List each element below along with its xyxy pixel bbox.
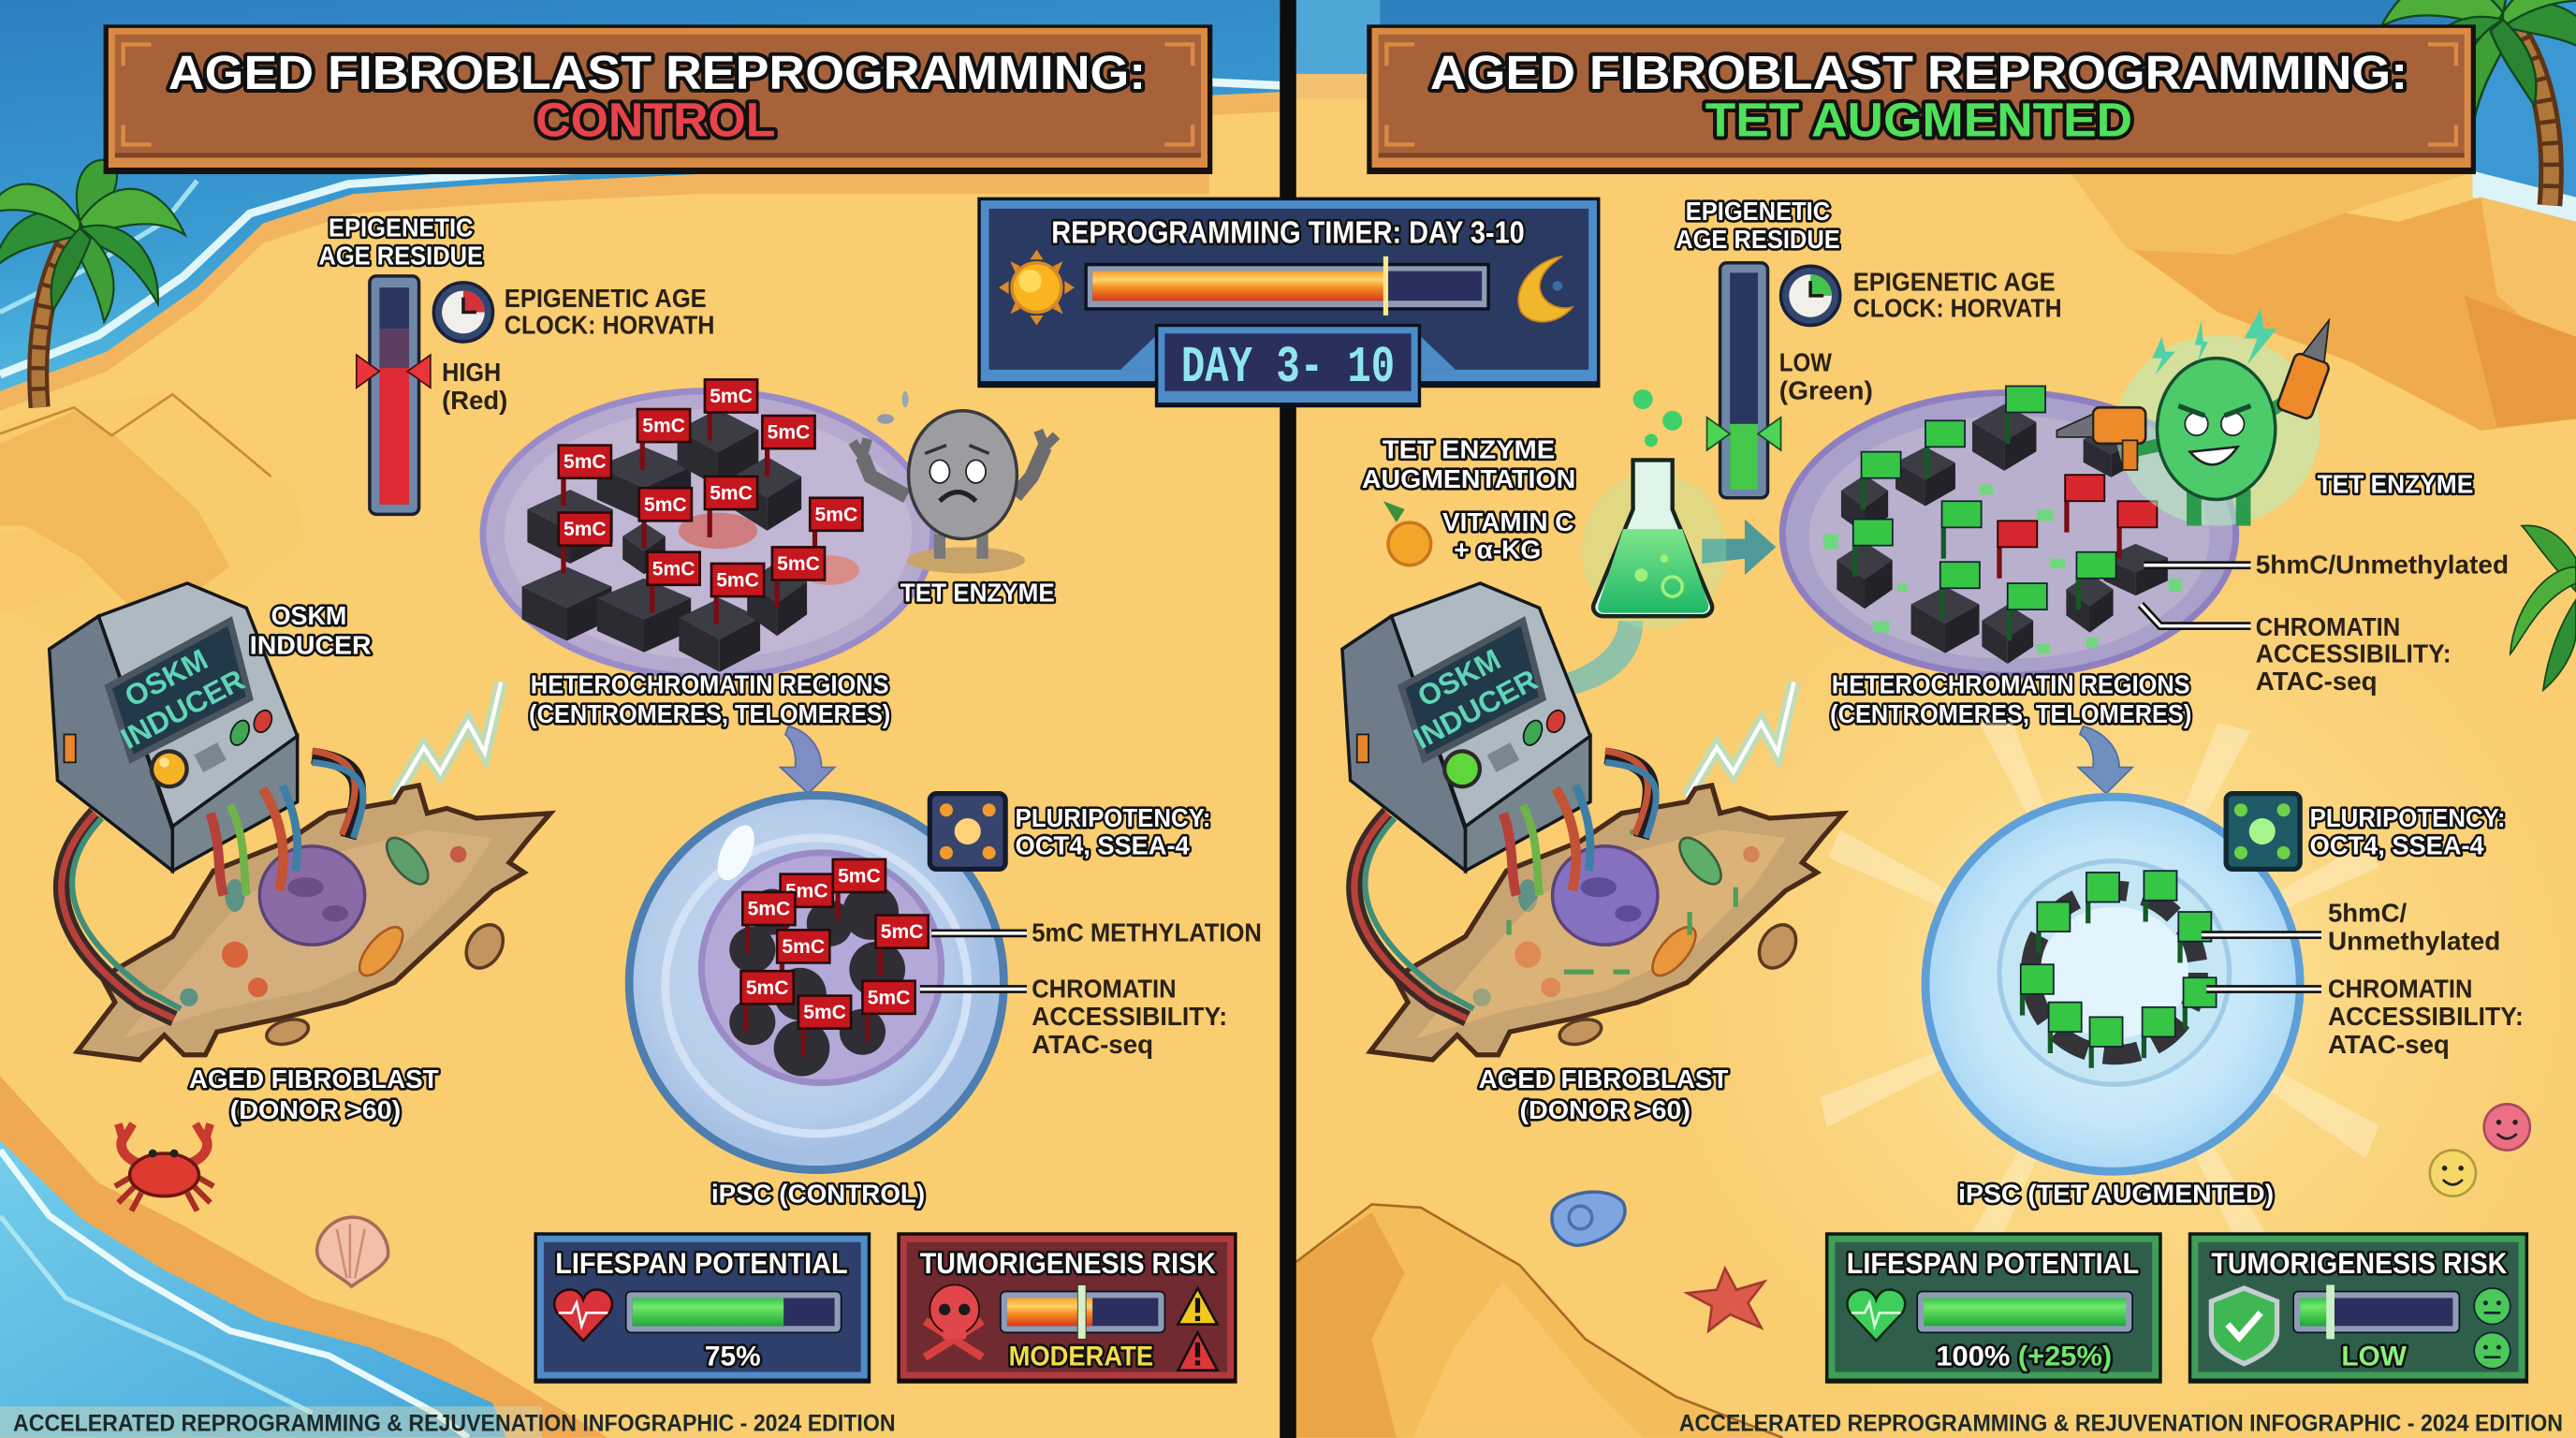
bar: 75 percent: [626, 1291, 842, 1332]
label: OSKM inducer control: INDUCER: [250, 631, 372, 660]
fibroblast cell TET: [1370, 785, 1843, 1060]
label: epigenetic age clock control: [505, 284, 714, 339]
machine: OSKM inducer TET: INDUCER: [1408, 662, 1543, 756]
label: pluripotency TET: PLURIPOTENCY:: [2310, 803, 2506, 832]
flags: 5mC: 5mC: [785, 880, 828, 902]
sand dunes: right top: [2070, 172, 2576, 431]
label: heterochromatin regions TET: (CENTROMERES, TELOMERES): [1830, 699, 2191, 728]
title text: AGED FIBROBLAST REPROGRAMMING:: [168, 46, 1146, 99]
panel: tumorigenesis risk TET: [2188, 1232, 2528, 1384]
label: aged fibroblast control: [189, 1064, 439, 1124]
icon: clock TET: [1781, 266, 1840, 325]
label: pluripotency TET: OCT4, SSEA-4: [2310, 831, 2484, 860]
icon: flask: [1582, 389, 1727, 629]
glow rays: iPSC TET: [1821, 723, 2378, 1262]
drill left: [2056, 407, 2145, 470]
label: epigenetic age residue, control: [318, 213, 483, 271]
flags: 5mC: 5mC: [777, 553, 820, 575]
flags: 5mC: 5mC: [642, 416, 685, 437]
icon: blue shell: [1552, 1192, 1625, 1245]
label: epigenetic age clock TET: [1853, 268, 2062, 323]
callout: 5mC methylation: 5mC METHYLATION: [1032, 918, 1262, 947]
label: epigenetic age residue, TET: [1676, 197, 1840, 254]
label: epigenetic age residue, TET: AGE RESIDUE: [1676, 225, 1840, 254]
callout: chromatin accessibility nucleus: ATAC-seq: [2256, 667, 2378, 696]
label: epigenetic age residue, control: AGE RESIDUE: [318, 242, 483, 271]
subtitle: control: CONTROL: [535, 94, 775, 147]
icon: crab: [115, 1123, 213, 1211]
label: pluripotency TET: [2310, 803, 2506, 860]
timer heading: REPROGRAMMING TIMER: DAY 3-10: [1051, 216, 1525, 251]
ocean: bottom left shoreline: [0, 1077, 607, 1438]
ocean and sky: right panel: [1296, 0, 2576, 222]
lightning: TET: [1687, 682, 1794, 797]
cell: iPSC TET augmented: [1925, 797, 2300, 1171]
drill right: [2276, 314, 2345, 420]
icon: pink smiley: [2484, 1104, 2530, 1151]
icon: clock control: [433, 283, 493, 342]
day counter: [1155, 324, 1421, 407]
fading chromatin blocks: [1837, 404, 2168, 664]
label: high: HIGH: [442, 358, 501, 387]
green fragments: [1823, 485, 2182, 654]
nucleus: heterochromatin TET: [1782, 386, 2236, 675]
label: aged fibroblast TET: (DONOR >60): [1519, 1095, 1690, 1124]
panel: tumorigenesis risk control: [897, 1232, 1237, 1384]
icon: orange: [1383, 501, 1431, 565]
callout: chromatin accessibility iPSC: ATAC-seq: [2328, 1030, 2450, 1059]
arrow: nucleus to iPSC TET: [2078, 726, 2132, 794]
timer bar: [1084, 257, 1490, 315]
icon: heart green: [1847, 1290, 1905, 1341]
panel: lifespan potential TET: [1825, 1232, 2162, 1384]
palm fronds: right middle: [2510, 525, 2576, 690]
icon: warning red: [1178, 1332, 1218, 1371]
label: TET enzyme control: TET ENZYME: [900, 578, 1055, 607]
callout: 5hmC unmethylated iPSC: 5hmC/: [2328, 899, 2407, 928]
bar: moderate: [1001, 1284, 1164, 1339]
machine: OSKM inducer TET: [1342, 583, 1656, 1019]
panel: lifespan potential control: LIFESPAN POTENTIAL: [555, 1246, 848, 1280]
flags: 5mC: [559, 379, 862, 624]
bar: low: [2293, 1284, 2459, 1339]
character: sad grey TET enzyme: [853, 391, 1057, 574]
panel: lifespan potential control: [534, 1232, 871, 1384]
panel: tumorigenesis risk control: TUMORIGENESIS RISK: [920, 1246, 1216, 1280]
flags: 5mC: [741, 859, 929, 1056]
label: epigenetic age clock TET: CLOCK: HORVATH: [1853, 294, 2062, 323]
label: OSKM inducer control: [250, 601, 372, 660]
label: pluripotency control: [1016, 803, 1211, 860]
label: vitamin C and alpha-KG: + α-KG: [1454, 536, 1541, 565]
label: TET enzyme augmentation: [1362, 435, 1575, 493]
icon: pluripotency TET: [2226, 794, 2300, 869]
label: high: (Red): [442, 386, 507, 415]
icon: sun: [999, 250, 1075, 325]
label: iPSC TET augmented: iPSC (TET AUGMENTED): [1958, 1180, 2274, 1209]
label: aged fibroblast TET: AGED FIBROBLAST: [1479, 1064, 1728, 1093]
label: epigenetic age clock control: EPIGENETIC AGE: [505, 284, 707, 313]
label: heterochromatin regions control: HETEROCHROMATIN REGIONS: [531, 670, 889, 699]
callout: 5hmC unmethylated iPSC: [2202, 899, 2500, 955]
callout: 5hmC unmethylated nucleus: 5hmC/Unmethylated: [2256, 550, 2509, 580]
chromatin blocks: [522, 409, 807, 672]
label: heterochromatin regions control: (CENTROMERES, TELOMERES): [529, 699, 890, 728]
callout: chromatin accessibility nucleus: CHROMATIN: [2256, 612, 2400, 641]
label: iPSC control: iPSC (CONTROL): [711, 1180, 925, 1209]
label: epigenetic age residue, TET: EPIGENETIC: [1686, 197, 1830, 226]
callout: chromatin accessibility control: [920, 974, 1227, 1059]
sand dunes: left: [0, 394, 304, 649]
flags: 5mC: 5mC: [710, 483, 753, 505]
flags: 5mC: 5mC: [803, 1002, 846, 1023]
flags: 5mC: 5mC: [881, 921, 923, 943]
callout: chromatin accessibility control: ACCESSIBILITY:: [1032, 1002, 1227, 1031]
arrow: flask to nucleus: [1702, 520, 1776, 575]
palm tree: left: [0, 160, 185, 407]
gauge: epigenetic age residue high: [357, 276, 431, 514]
callout: chromatin accessibility iPSC: ACCESSIBILITY:: [2328, 1002, 2524, 1031]
label: TET enzyme augmentation: AUGMENTATION: [1362, 464, 1575, 493]
footer: left: ACCELERATED REPROGRAMMING & REJUVENATION INFOGRAPHIC - 2024 EDITION: [13, 1412, 896, 1437]
flags: 5mC: 5mC: [564, 451, 607, 473]
label: aged fibroblast control: AGED FIBROBLAST: [189, 1064, 439, 1093]
panel: reprogramming timer: [977, 198, 1600, 407]
nucleus: heterochromatin control: [483, 379, 933, 677]
callout: chromatin accessibility iPSC: [2206, 974, 2524, 1059]
label: epigenetic age clock TET: EPIGENETIC AGE: [1853, 268, 2056, 297]
icon: shield: [2211, 1288, 2277, 1364]
label: low: (Green): [1779, 375, 1873, 404]
title banner: TET augmented: [1367, 24, 2476, 174]
label: heterochromatin regions TET: [1830, 670, 2191, 728]
label: pluripotency control: OCT4, SSEA-4: [1016, 831, 1190, 860]
icon: pluripotency control: [929, 794, 1005, 869]
callout: chromatin accessibility iPSC: CHROMATIN: [2328, 974, 2472, 1003]
gauge: epigenetic age residue low: [1707, 263, 1781, 498]
label: pluripotency control: PLURIPOTENCY:: [1016, 803, 1211, 832]
machine: OSKM inducer control: OSKM: [119, 642, 213, 713]
subtitle: TET augmented: TET AUGMENTED: [1705, 94, 2132, 147]
flags: green: [2021, 871, 2217, 1068]
callout: chromatin accessibility nucleus: ACCESSIBILITY:: [2256, 638, 2452, 668]
callout: chromatin accessibility control: CHROMATIN: [1032, 974, 1177, 1003]
label: aged fibroblast TET: [1479, 1064, 1728, 1124]
icon: heart: [554, 1290, 612, 1341]
flags: 5mC: 5mC: [746, 977, 788, 999]
center divider: [1280, 0, 1296, 1438]
title text: AGED FIBROBLAST REPROGRAMMING:: [1430, 46, 2408, 99]
icon: moon: [1518, 257, 1573, 322]
panel: lifespan potential control: 75%: [705, 1341, 761, 1372]
flags: 5mC: 5mC: [710, 386, 753, 407]
flags: 5mC: 5mC: [815, 504, 857, 525]
label: aged fibroblast control: (DONOR >60): [230, 1095, 401, 1124]
ocean: top left shoreline: [0, 0, 1280, 411]
chromatin ring: [2030, 890, 2198, 1055]
flags: 5mC: 5mC: [768, 422, 810, 444]
palm tree: top right: [2381, 0, 2576, 205]
sand dune: bottom right: [1296, 1204, 1782, 1438]
callout: chromatin accessibility nucleus: [2141, 605, 2452, 696]
icon: green face: [2474, 1288, 2510, 1325]
callout: 5hmC unmethylated iPSC: Unmethylated: [2328, 926, 2500, 955]
panel: tumorigenesis risk TET: TUMORIGENESIS RISK: [2211, 1246, 2507, 1280]
label: vitamin C and alpha-KG: [1442, 507, 1573, 565]
flags: 5mC: 5mC: [782, 936, 825, 958]
flags: 5mC: 5mC: [716, 570, 759, 592]
icon: skull and crossbones: [925, 1284, 983, 1357]
icon: seashell: [317, 1217, 388, 1286]
character: green TET enzyme with drills: [2056, 309, 2345, 526]
icon: starfish: [1687, 1269, 1764, 1331]
label: low: [1779, 348, 1873, 404]
machine: OSKM inducer control: [50, 583, 363, 1019]
label: epigenetic age clock control: CLOCK: HORVATH: [505, 310, 714, 339]
arrow: flask to machine: [1553, 621, 1643, 698]
flags: 5mC: 5mC: [652, 558, 695, 580]
panel: tumorigenesis risk TET: LOW: [2341, 1341, 2408, 1372]
fibroblast cell control: [77, 785, 550, 1060]
label: OSKM inducer control: OSKM: [271, 601, 346, 630]
flags: green and red: [1853, 386, 2157, 640]
machine: OSKM inducer control: INDUCER: [115, 662, 250, 756]
icon: green face lower: [2474, 1332, 2510, 1369]
label: TET enzyme augmented: TET ENZYME: [2318, 470, 2473, 499]
panel: lifespan potential TET: LIFESPAN POTENTIAL: [1847, 1246, 2139, 1280]
icon: warning yellow: [1178, 1288, 1218, 1325]
callout: chromatin accessibility control: ATAC-seq: [1032, 1030, 1153, 1059]
flags: 5mC: 5mC: [748, 899, 790, 920]
icon: yellow smiley: [2430, 1151, 2476, 1196]
energy sparks: [2152, 309, 2277, 374]
label: epigenetic age residue, control: EPIGENETIC: [329, 213, 473, 242]
label: high: [442, 358, 507, 415]
label: TET enzyme augmentation: TET ENZYME: [1383, 435, 1555, 464]
flags: 5mC: 5mC: [644, 494, 687, 516]
arrow: nucleus to iPSC control: [781, 726, 835, 794]
flags: 5mC: 5mC: [868, 987, 910, 1008]
label: low: LOW: [1779, 348, 1832, 377]
cell: iPSC control: [629, 795, 1003, 1170]
bar: 100 percent: [1917, 1291, 2132, 1332]
label: heterochromatin regions TET: HETEROCHROMATIN REGIONS: [1832, 670, 2190, 699]
lifespan value: 100% (+25%): [1936, 1341, 2112, 1372]
flags: 5mC: 5mC: [838, 865, 881, 887]
chromatin blobs: [729, 884, 905, 1077]
label: heterochromatin regions control: [529, 670, 890, 728]
flags: 5mC: 5mC: [564, 519, 607, 540]
lightning: control: [394, 682, 501, 797]
machine: OSKM inducer TET: OSKM: [1412, 642, 1506, 713]
label: vitamin C and alpha-KG: VITAMIN C: [1442, 507, 1573, 536]
day counter: DAY 3- 10: [1181, 340, 1395, 397]
title banner: control: [104, 24, 1212, 174]
panel: tumorigenesis risk control: MODERATE: [1009, 1341, 1153, 1372]
